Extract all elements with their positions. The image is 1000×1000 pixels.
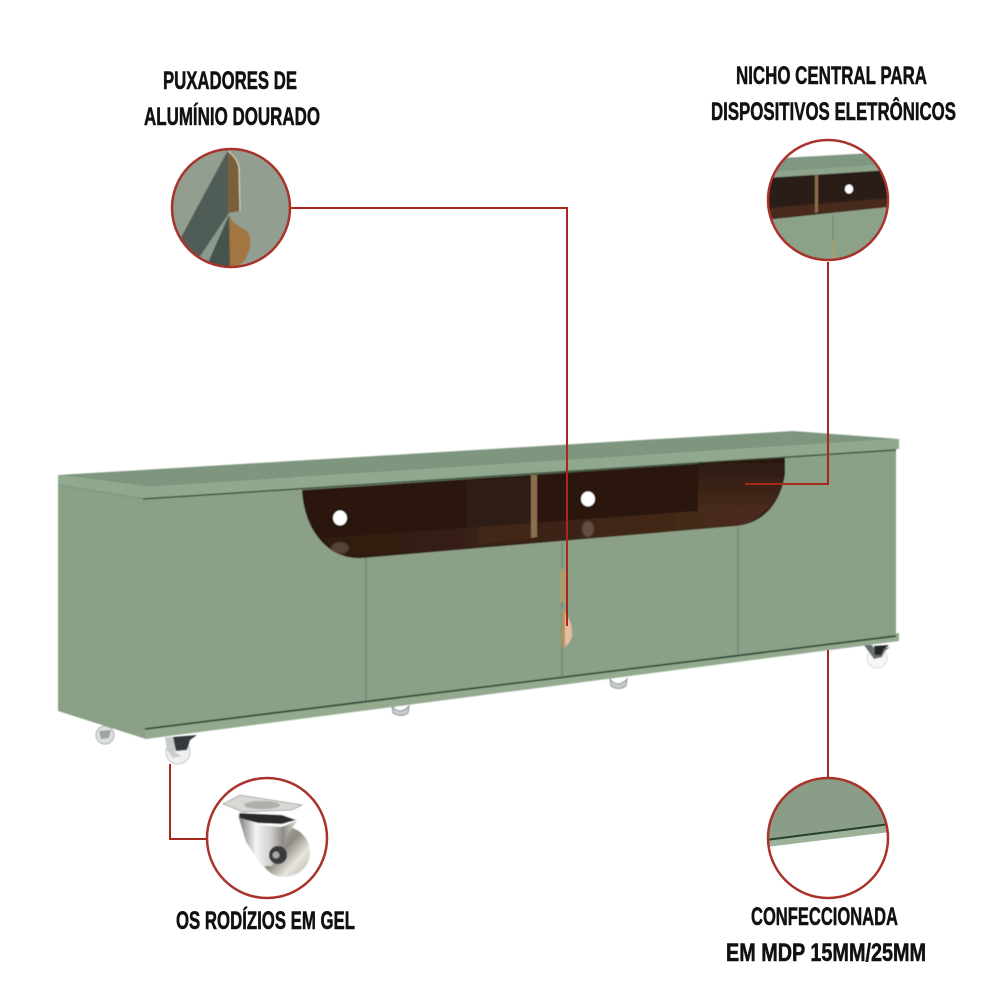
tv stand furniture — [58, 431, 899, 764]
heading: niche — [711, 62, 956, 126]
rear and side casters — [96, 645, 890, 764]
bottom plinth — [144, 633, 899, 739]
right compartment wall — [698, 458, 785, 516]
central divider — [531, 475, 537, 538]
base shadow line — [145, 636, 896, 729]
axle — [269, 846, 287, 864]
shelf reflections — [582, 521, 594, 537]
heading: material: EM MDP 15MM/25MM — [726, 939, 926, 967]
central niche — [302, 458, 785, 558]
cable hole left — [332, 510, 348, 526]
caster bracket — [238, 815, 298, 866]
heading: material — [726, 903, 926, 967]
heading: handles: PUXADORES DE — [163, 67, 297, 95]
callout circle: central niche — [766, 138, 890, 262]
leader line: material — [827, 650, 829, 779]
leader line: handles — [290, 208, 567, 626]
left inner wall — [467, 477, 531, 529]
cabinet front — [145, 449, 896, 729]
gold door handles — [561, 568, 572, 648]
niche floor — [322, 505, 770, 558]
callout circle: material — [766, 776, 890, 900]
mounting plate — [223, 795, 302, 812]
heading: handles — [144, 67, 320, 131]
heading: handles: ALUMÍNIO DOURADO — [144, 102, 320, 131]
bearing ring — [239, 813, 296, 824]
top surface — [58, 431, 899, 487]
heading: casters: OS RODÍZIOS EM GEL — [176, 906, 355, 935]
leader line: casters — [170, 764, 208, 839]
cable hole right — [580, 490, 596, 508]
callout circle: caster — [205, 776, 329, 900]
callout circle: gold handles — [170, 148, 292, 272]
heading: material: CONFECCIONADA — [751, 903, 898, 931]
door seams — [366, 527, 738, 701]
side panel — [58, 484, 146, 739]
top slab front edge — [58, 439, 899, 499]
leader line: niche — [745, 262, 828, 484]
caster wheel — [264, 826, 310, 877]
